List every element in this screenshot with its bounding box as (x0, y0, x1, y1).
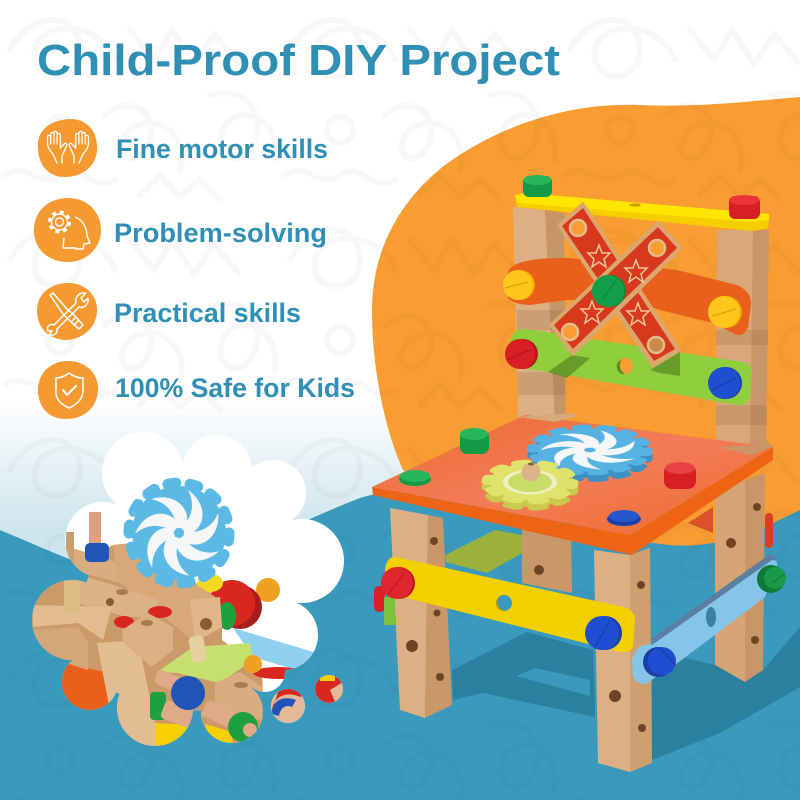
green end (384, 597, 395, 625)
green screw side (757, 565, 786, 593)
icon: shield with check (38, 361, 98, 419)
small bubble contents (271, 675, 343, 723)
red screw (505, 339, 538, 369)
back crossbar green (445, 530, 522, 573)
cloud photo of toy parts (32, 432, 344, 746)
star board X (550, 203, 682, 367)
back-right leg (715, 473, 765, 682)
blue screw side (643, 647, 676, 677)
label: Fine motor skills (116, 134, 328, 164)
under-seat red brace (688, 507, 713, 533)
orange arc bar (508, 258, 751, 335)
blue screw (171, 676, 205, 710)
wooden beams (33, 543, 222, 670)
yellow-green gear part (157, 643, 253, 683)
yellow seat gear (488, 463, 572, 508)
wooden plank (97, 640, 160, 747)
icon: hands (38, 119, 97, 177)
left post (513, 207, 566, 422)
red screw back-left (374, 586, 385, 612)
wooden cube (122, 613, 173, 667)
seat screw red (664, 462, 696, 489)
front-left leg (390, 508, 452, 718)
blue seat gear (534, 427, 646, 479)
floor shadows (452, 627, 800, 760)
yellow parts (155, 723, 193, 745)
seat screw green back (460, 428, 489, 454)
green bar (510, 329, 752, 405)
wood mass underlayer (30, 543, 265, 750)
large blue spiral gear (129, 483, 229, 583)
red discs (209, 580, 262, 629)
yellow screw left (503, 270, 535, 300)
yellow front bar (385, 557, 635, 652)
label: Problem-solving (114, 218, 327, 248)
back-left leg (522, 525, 572, 593)
seat (372, 413, 773, 555)
label: 100% Safe for Kids (115, 373, 355, 403)
light blue panel (233, 628, 314, 668)
icon: head with gear (34, 198, 101, 262)
right post (716, 230, 769, 455)
yellow screw right (708, 296, 742, 328)
red screw front-left (381, 567, 415, 599)
top screw green (523, 175, 552, 197)
front-center leg (594, 548, 652, 772)
wooden bead (522, 462, 540, 482)
wooden cube lower (215, 672, 262, 720)
icon: wrench and screwdriver (37, 283, 97, 340)
feature: practical skills (37, 283, 301, 340)
orange block (62, 664, 108, 710)
threaded bolts (154, 670, 180, 690)
feature: fine motor skills (38, 119, 328, 177)
green screw (228, 712, 258, 742)
orange screw (256, 578, 280, 602)
board two (550, 222, 682, 355)
seat screw green front (399, 470, 431, 486)
blue floor (0, 477, 800, 800)
chair (372, 175, 800, 772)
feature: problem-solving (34, 198, 327, 262)
top screw red (729, 195, 760, 219)
blue side bar (632, 554, 778, 684)
feature list (34, 119, 355, 419)
blue screw (708, 367, 742, 399)
seat screw blue (607, 510, 641, 526)
orange blob (372, 97, 800, 546)
label: Practical skills (114, 298, 301, 328)
bolts (89, 512, 101, 544)
blue screw front (585, 616, 622, 650)
blue nut (85, 543, 109, 562)
board one (558, 203, 680, 367)
top rail yellow (515, 193, 769, 231)
center screw green (592, 275, 626, 307)
title: Child-Proof DIY Project (37, 36, 560, 85)
feature: safe for kids (38, 361, 355, 419)
